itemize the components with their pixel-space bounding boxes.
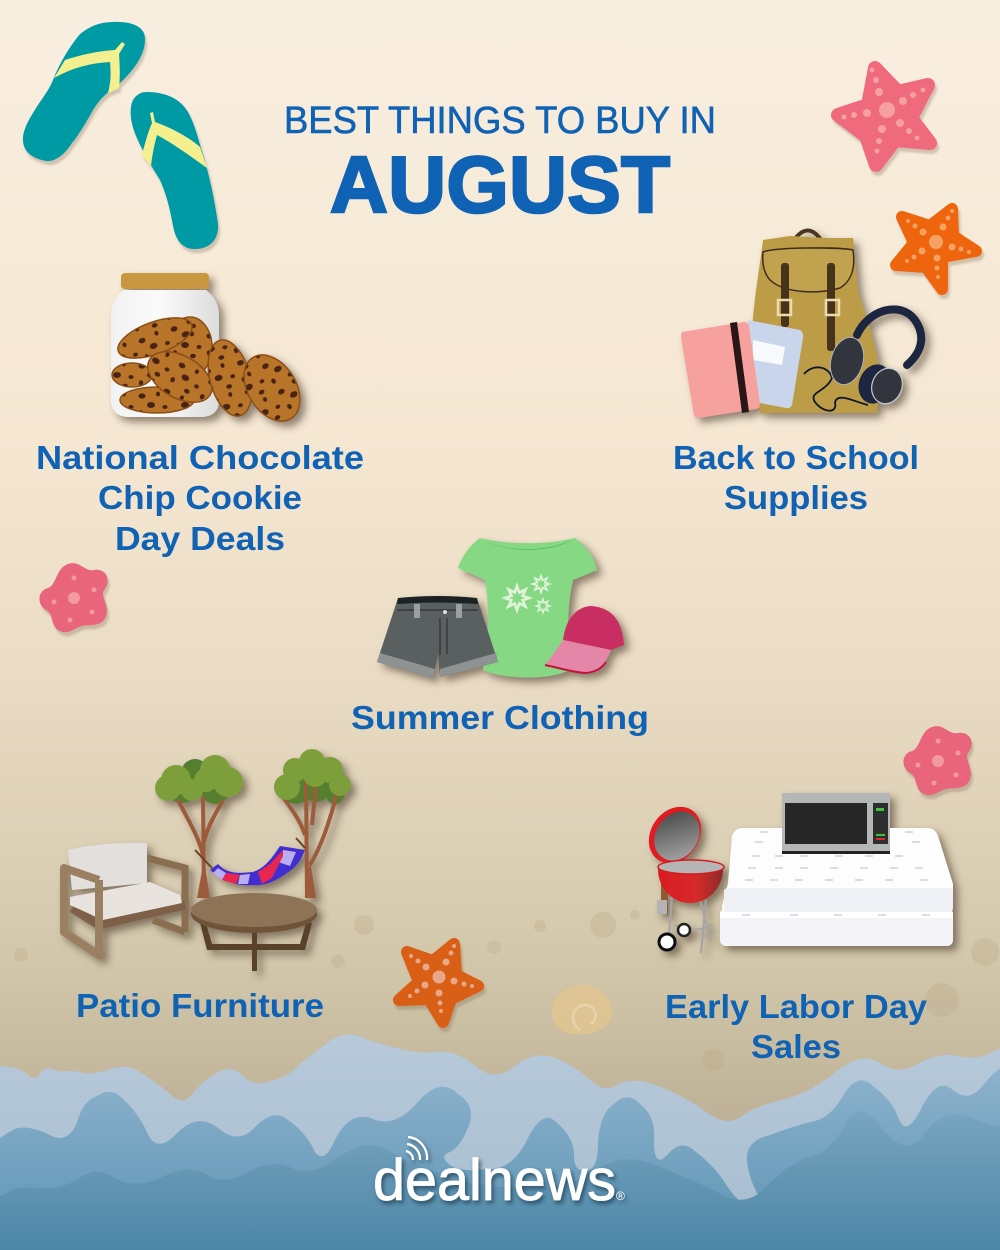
label: back to school: Back to School — [673, 439, 919, 476]
title: AUGUST — [330, 140, 670, 229]
icon: summer clothes — [377, 538, 624, 678]
label: cookie deals: National Chocolate — [36, 439, 364, 476]
label: cookie deals — [36, 439, 364, 557]
sand pebbles — [14, 910, 999, 1071]
icon: seashell — [552, 985, 612, 1034]
icon: orange starfish top right — [896, 209, 976, 289]
label: patio furniture: Patio Furniture — [76, 987, 324, 1024]
label: labor day: Sales — [751, 1028, 841, 1065]
title — [284, 100, 716, 229]
waves — [0, 1035, 1000, 1250]
logo: dealnews: ® — [616, 1189, 625, 1203]
title: BEST THINGS TO BUY IN — [284, 100, 716, 142]
icon: patio furniture and hammock — [64, 749, 351, 971]
icon: cookie jar — [111, 273, 311, 431]
label: back to school — [673, 439, 919, 516]
icon: small pink starfish left — [39, 563, 108, 632]
label: summer clothing: Summer Clothing — [351, 699, 649, 736]
icon: grill, mattress and microwave — [638, 793, 953, 953]
icon: pink starfish top right — [838, 68, 930, 165]
icon: pink starfish right — [903, 726, 972, 795]
icon: orange starfish bottom — [399, 944, 478, 1022]
logo: dealnews: dealnews — [373, 1148, 616, 1213]
label: cookie deals: Day Deals — [115, 520, 285, 557]
label: cookie deals: Chip Cookie — [98, 479, 302, 516]
label: back to school: Supplies — [724, 479, 868, 516]
label: labor day — [665, 988, 928, 1065]
icon: backpack with notebooks and headphones — [681, 230, 921, 418]
label: labor day: Early Labor Day — [665, 988, 928, 1025]
icon: flip flops — [23, 22, 218, 249]
